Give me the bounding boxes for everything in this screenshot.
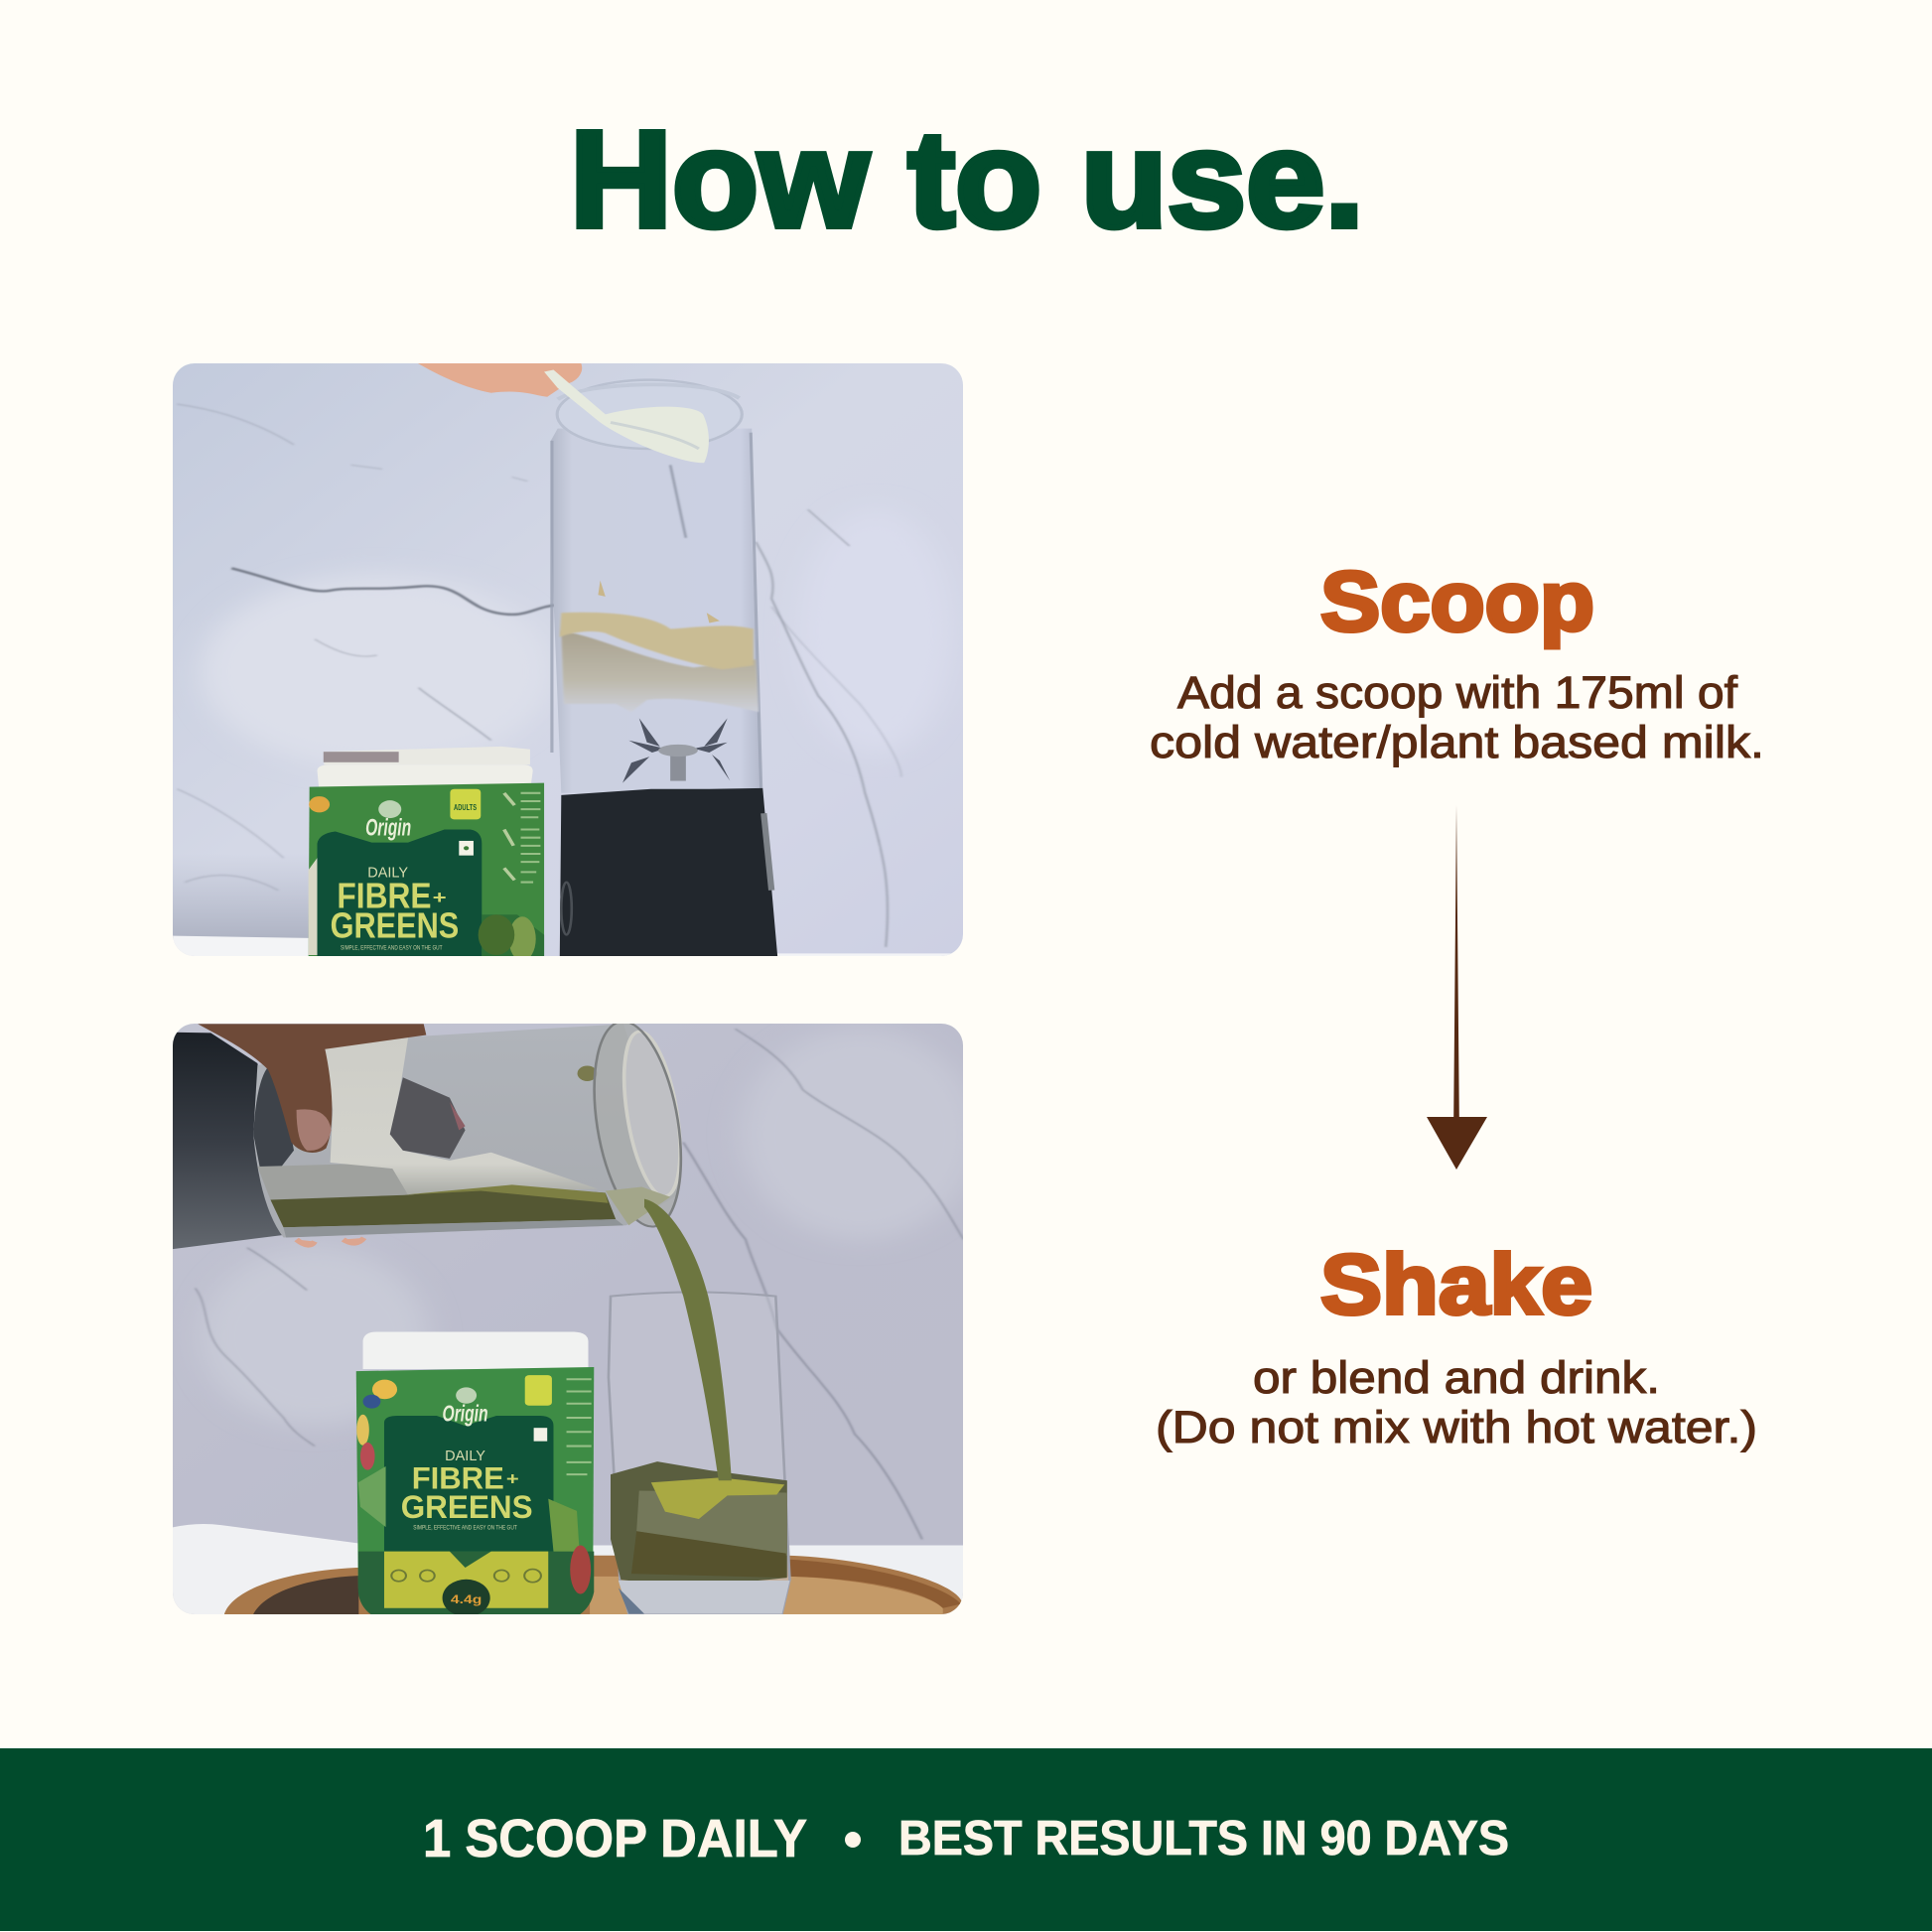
text block: scoop instructions: cold water/plant based milk. (1150, 717, 1764, 767)
marble wall (173, 363, 963, 956)
product jar: GREENS (331, 905, 459, 945)
product jar (309, 747, 544, 961)
panel: scoop photo (173, 363, 963, 956)
product jar: + (433, 886, 447, 907)
blender cup (253, 1025, 627, 1237)
dark sleeve arm (159, 1033, 286, 1251)
blender bottle (544, 369, 777, 959)
panel: shake photo (159, 1013, 990, 1636)
product jar: FIBRE (337, 876, 432, 916)
product jar: SIMPLE, EFFECTIVE AND EASY ON THE GUT (413, 1524, 517, 1531)
product jar: GREENS (401, 1488, 533, 1525)
marble wall (159, 1013, 990, 1628)
product jar: Origin (443, 1400, 488, 1426)
heading: Shake: Shake (1320, 1238, 1592, 1332)
footer text: best results: BEST RESULTS IN 90 DAYS (898, 1812, 1509, 1865)
text block: shake instructions (1156, 1352, 1757, 1452)
text block: shake instructions: (Do not mix with hot water.) (1156, 1402, 1757, 1452)
product jar: DAILY (367, 865, 408, 881)
product jar: 4.4g (451, 1592, 482, 1605)
text block: scoop instructions (1150, 667, 1764, 767)
table edge (159, 935, 990, 979)
text block: shake instructions: or blend and drink. (1253, 1352, 1660, 1403)
product jar: ADULTS (454, 803, 477, 812)
heading: Scoop: Scoop (1320, 555, 1594, 649)
product jar: DAILY (445, 1448, 485, 1463)
footer text: 1 scoop daily: 1 SCOOP DAILY (423, 1809, 807, 1868)
white table (173, 1524, 357, 1614)
drinking glass (609, 1293, 789, 1613)
blender blades (622, 718, 730, 783)
product jar: FIBRE (412, 1460, 504, 1495)
scoop (544, 369, 709, 463)
wooden tray (223, 1556, 963, 1636)
title: How to use. (570, 103, 1364, 256)
footer banner (0, 1748, 1932, 1931)
product jar: SIMPLE, EFFECTIVE AND EASY ON THE GUT (341, 943, 443, 951)
thumb and hand (198, 1024, 426, 1245)
product jar: Origin (365, 814, 411, 841)
product jar (356, 1332, 594, 1620)
bullet separator (845, 1832, 861, 1848)
arrow (1427, 805, 1487, 1170)
hand (416, 362, 582, 397)
text block: scoop instructions: Add a scoop with 175ml of (1177, 667, 1738, 718)
base (560, 788, 777, 959)
powder residue (561, 631, 759, 712)
product jar: + (506, 1470, 519, 1489)
cup rim (593, 1024, 683, 1227)
pouring liquid (644, 1199, 732, 1480)
